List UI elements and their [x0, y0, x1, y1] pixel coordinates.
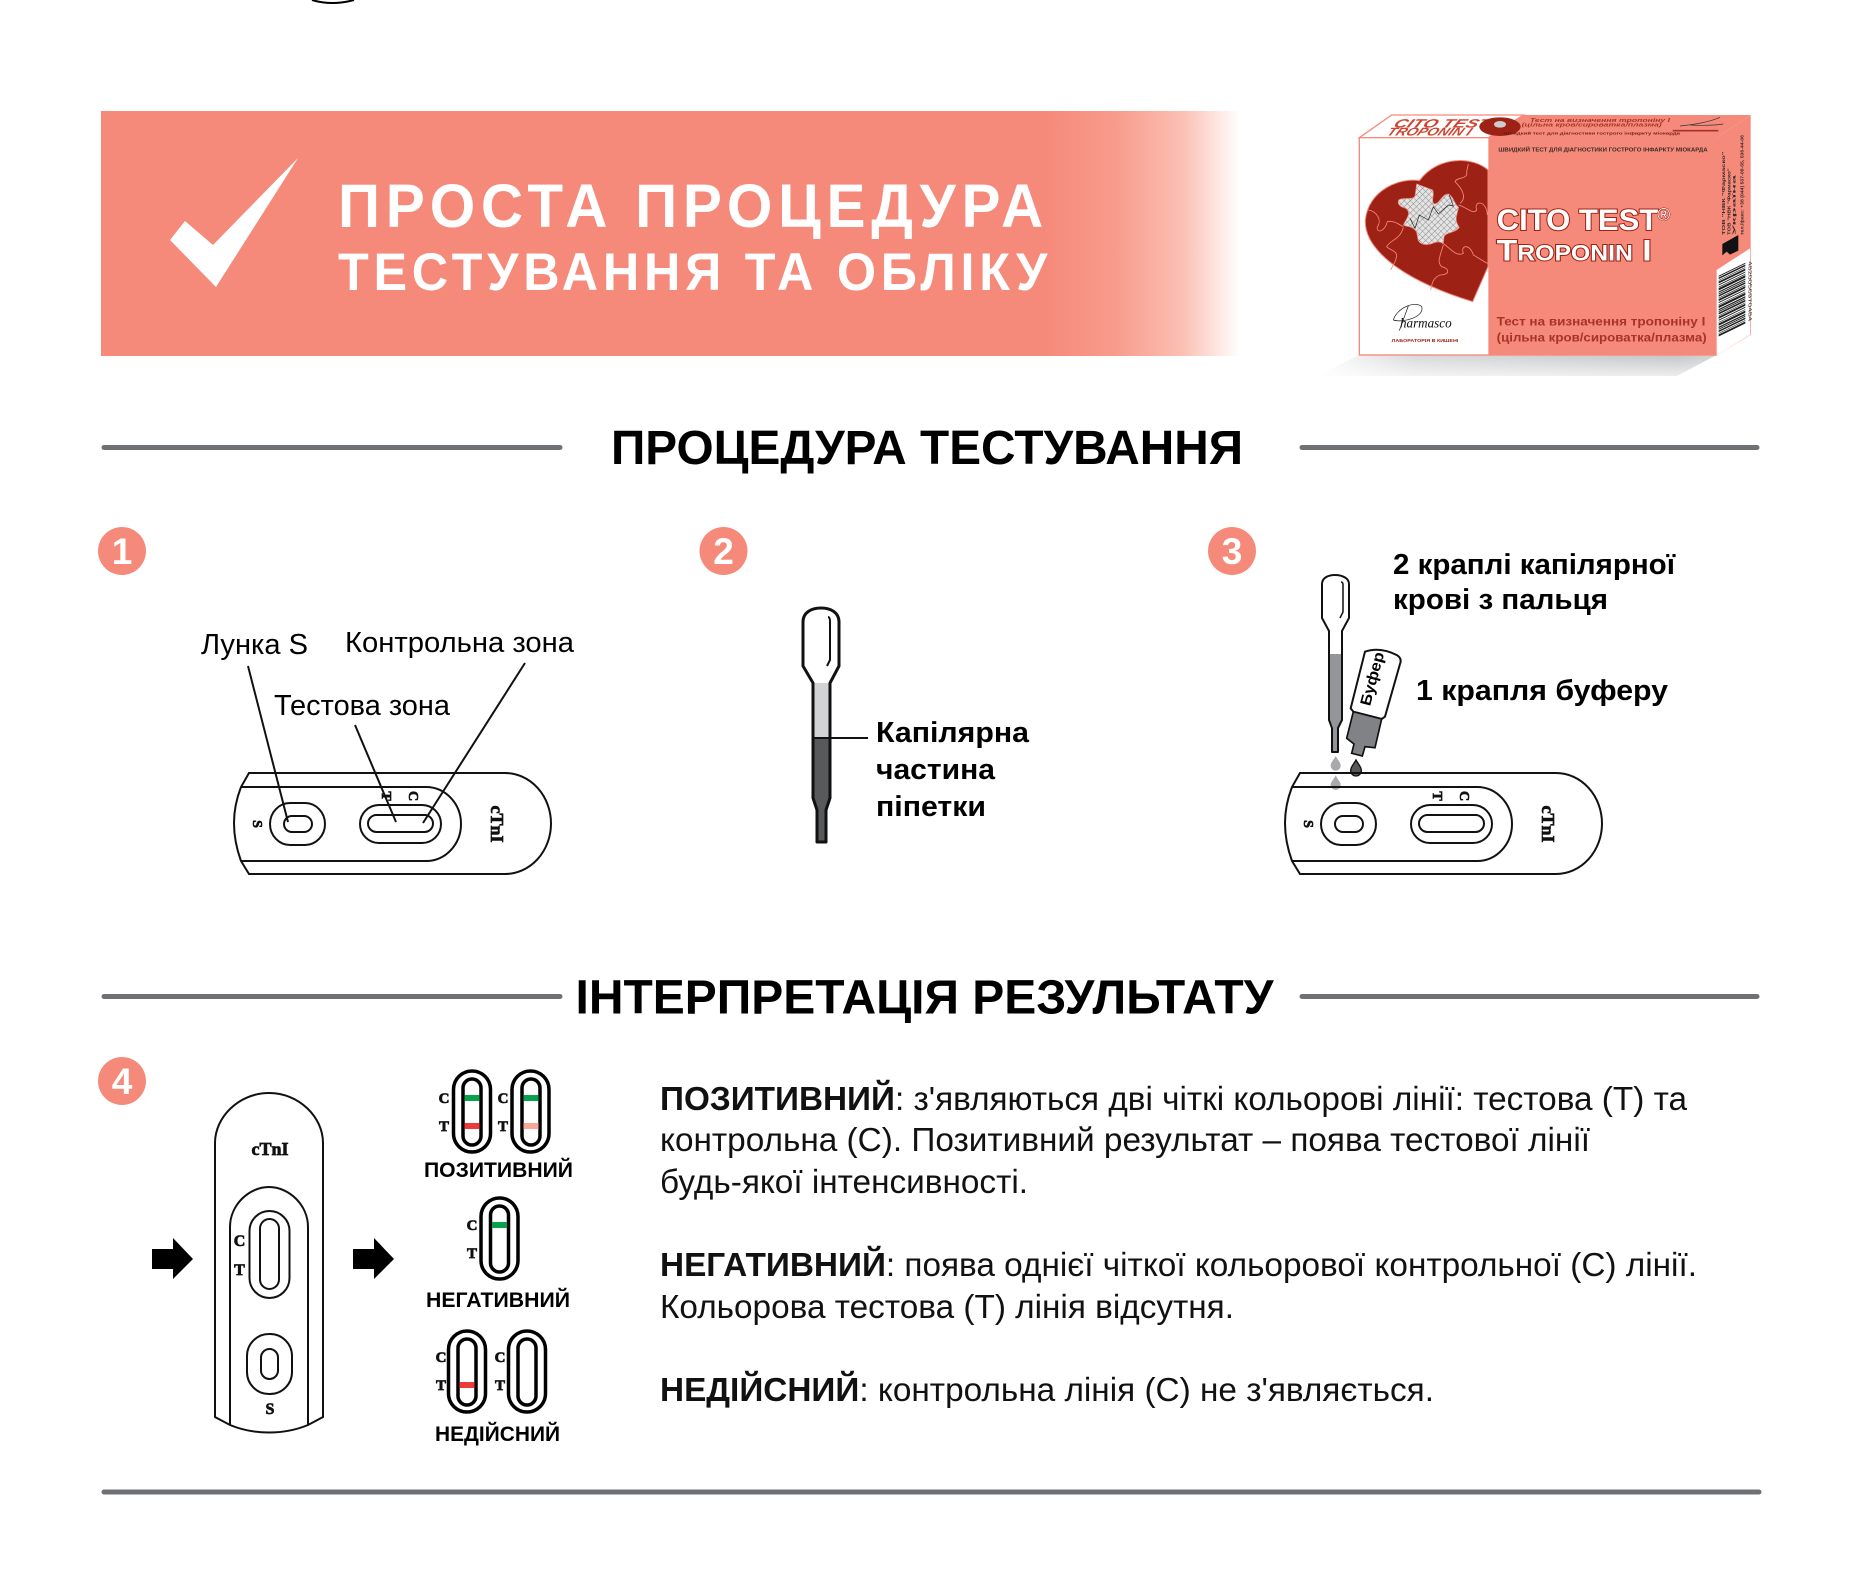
box shadow — [1317, 355, 1717, 376]
label: capillary part of pipette: піпетки — [876, 791, 986, 823]
step 3 — [1208, 527, 1676, 874]
icon: check mark — [170, 158, 298, 287]
cropped decorative arc at top edge — [312, 0, 354, 3]
arrow into cassette — [152, 1238, 193, 1279]
box top face: (цільна кров/сироватка/плазма) — [1522, 123, 1662, 129]
cassette markings: C — [405, 791, 420, 801]
arrow to results — [353, 1238, 394, 1279]
cassette markings — [249, 791, 507, 843]
box side face — [1717, 115, 1752, 355]
cassette markings: S — [1300, 820, 1315, 828]
result: positive: ПОЗИТИВНИЙ — [424, 1158, 573, 1182]
label: capillary part of pipette: Капілярна — [876, 717, 1030, 749]
box description: (цільна кров/сироватка/плазма) — [1497, 330, 1707, 344]
brand name: TROPONIN I — [1497, 235, 1652, 268]
brand name — [1497, 204, 1670, 268]
labels for test cassette — [201, 627, 575, 722]
result: positive — [424, 1071, 573, 1182]
section heading: result interpretation: ІНТЕРПРЕТАЦІЯ РЕЗУЛЬТАТУ — [576, 972, 1275, 1024]
badge 2: 2 — [713, 531, 734, 572]
banner title — [338, 172, 1052, 302]
positive description: ПОЗИТИВНИЙ: з'являються дві чіткі кольорові лінії: тестова (Т) та — [660, 1079, 1688, 1117]
result: positive: C — [498, 1091, 508, 1107]
step 3 instructions: 1 крапля буферу — [1416, 675, 1668, 707]
step 2 — [700, 527, 1030, 842]
cassette markings — [1300, 791, 1558, 843]
result: invalid — [435, 1331, 560, 1446]
box side face: тел./факс: +38 (044) 537-08-55, 536-44-06 — [1740, 134, 1745, 235]
cassette markings: cTnI — [487, 805, 507, 843]
invalid description: НЕДІЙСНИЙ: контрольна лінія (С) не з'являється. — [660, 1370, 1434, 1408]
result: negative: C — [467, 1218, 477, 1234]
cassette drawing — [1285, 773, 1602, 874]
result: negative — [426, 1198, 570, 1312]
badge 2 — [700, 527, 748, 575]
box top face: CITO TEST — [1391, 116, 1495, 130]
badge 4 — [98, 1057, 146, 1105]
positive description: будь-якої інтенсивності. — [660, 1163, 1028, 1200]
interpretation text — [660, 1079, 1697, 1408]
result: negative: T — [467, 1246, 477, 1262]
cassette markings: T — [1429, 791, 1444, 801]
box side face: ТОВ "НВК "Фармаско" — [1721, 152, 1726, 235]
brand name: ® — [1657, 205, 1670, 225]
box top face: Швидкий тест для діагностики гострого інфаркту міокарда — [1503, 132, 1680, 136]
pipette with blood — [1322, 575, 1349, 752]
puzzle heart — [1365, 161, 1488, 302]
negative description: Кольорова тестова (Т) лінія відсутня. — [660, 1288, 1234, 1325]
step 3 instructions: крові з пальця — [1393, 584, 1608, 616]
box subtitle: ШВИДКИЙ ТЕСТ ДЛЯ ДІАГНОСТИКИ ГОСТРОГО ІНФАРКТУ МІОКАРДА — [1498, 145, 1708, 153]
banner title: ПРОСТА ПРОЦЕДУРА — [338, 172, 1049, 240]
cassette markings: C — [1456, 791, 1471, 801]
cassette drawing — [234, 663, 551, 874]
badge 3 — [1208, 527, 1256, 575]
box description — [1497, 315, 1707, 344]
vertical cassette markings: S — [266, 1401, 275, 1418]
logo: Pharmasco: ЛАБОРАТОРІЯ В КИШЕНІ — [1392, 338, 1459, 344]
vertical cassette markings — [234, 1139, 289, 1418]
labels for test cassette: Лунка S — [201, 629, 308, 661]
product box: Cito Test Troponin I — [1317, 115, 1752, 376]
vertical cassette markings: C — [234, 1233, 245, 1250]
badge 1: 1 — [112, 531, 132, 572]
section heading: testing procedure: ПРОЦЕДУРА ТЕСТУВАННЯ — [611, 422, 1243, 475]
labels for test cassette: Контрольна зона — [345, 627, 575, 659]
label: capillary part of pipette: частина — [876, 754, 996, 786]
cassette markings: T — [378, 791, 393, 801]
box side face: Україна — [1732, 173, 1737, 235]
step 3 instructions: 2 краплі капілярної — [1393, 549, 1676, 581]
result: invalid: НЕДІЙСНИЙ — [435, 1422, 560, 1446]
buffer bottle and drops: Буфер — [1357, 650, 1388, 708]
labels for test cassette: Тестова зона — [274, 690, 451, 722]
logo: Pharmasco — [1392, 304, 1459, 344]
vertical cassette — [215, 1093, 323, 1432]
buffer bottle and drops — [1331, 650, 1401, 790]
result: negative: НЕГАТИВНИЙ — [426, 1288, 570, 1312]
box top face: Тест на визначення тропоніну I — [1530, 118, 1671, 124]
badge 3: 3 — [1222, 531, 1242, 572]
cassette markings: S — [249, 820, 264, 828]
banner title: ТЕСТУВАННЯ ТА ОБЛІКУ — [338, 243, 1052, 302]
positive description — [660, 1079, 1688, 1200]
box side face: ТОВ "НВК "Фармаско" — [1726, 168, 1731, 235]
result: positive: T — [439, 1119, 449, 1135]
box side face: 4820056970484 — [1747, 260, 1752, 323]
brand name: CITO TEST — [1497, 204, 1658, 237]
box description: Тест на визначення тропоніну I — [1497, 315, 1705, 329]
result: invalid: T — [436, 1378, 446, 1394]
positive description: контрольна (С). Позитивний результат – поява тестової лінії — [660, 1121, 1590, 1158]
result: positive: C — [439, 1091, 449, 1107]
result: invalid: T — [495, 1378, 505, 1394]
step 4 — [98, 1057, 573, 1446]
negative description: НЕГАТИВНИЙ: поява однієї чіткої кольорової контрольної (С) лінії. — [660, 1245, 1697, 1283]
vertical cassette markings: T — [234, 1262, 245, 1279]
step 3 instructions — [1393, 549, 1676, 707]
result: positive: T — [498, 1119, 508, 1135]
box top face — [1359, 115, 1751, 138]
badge 4: 4 — [112, 1061, 133, 1102]
logo: Pharmasco: harmasco — [1400, 315, 1452, 330]
step 1 — [98, 527, 575, 874]
pipette — [803, 608, 868, 842]
box top face: TROPONIN I — [1385, 125, 1476, 138]
result: invalid: C — [436, 1350, 446, 1366]
negative description — [660, 1245, 1697, 1325]
label: capillary part of pipette — [876, 717, 1030, 823]
badge 1 — [98, 527, 146, 575]
vertical cassette markings: cTnI — [251, 1139, 289, 1159]
result: invalid: C — [495, 1350, 505, 1366]
cassette markings: cTnI — [1538, 805, 1558, 843]
box front face — [1359, 138, 1717, 355]
banner: simple procedure — [101, 111, 1241, 356]
